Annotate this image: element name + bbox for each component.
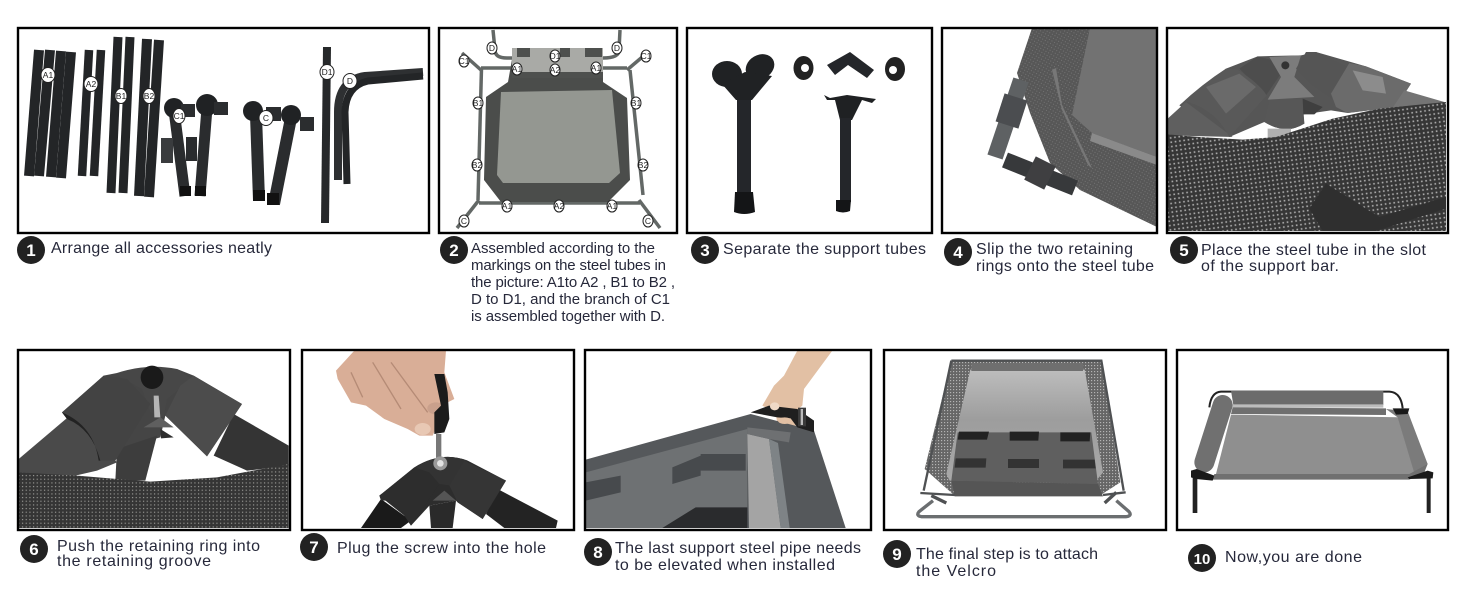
velcro strips <box>955 432 1096 468</box>
part labels: A1 <box>502 201 512 211</box>
bottom support bar <box>918 501 1130 517</box>
part labels: D <box>489 43 495 53</box>
mesh fabric <box>1168 102 1446 231</box>
assembled support tube <box>712 49 779 214</box>
panel: step 2 marked frame layout photo <box>438 27 677 233</box>
steel tube frame <box>457 30 660 228</box>
panel: step 1 accessories photo <box>17 27 429 233</box>
back frame <box>1209 392 1403 408</box>
screwdriver <box>434 374 449 461</box>
panel: step 4 retaining rings photo <box>941 27 1157 233</box>
tubes B1 <box>111 37 130 193</box>
steel tube with upper ring <box>995 80 1021 157</box>
panel: step 10 finished bed photo <box>1176 349 1448 530</box>
mesh fabric <box>19 464 289 528</box>
part labels: A1 <box>43 70 53 80</box>
step 9 caption <box>883 540 1098 580</box>
step 2 caption: D to D1, and the branch of C1 <box>471 291 670 308</box>
part labels: B2 <box>472 160 482 170</box>
part labels <box>459 42 653 227</box>
step 5 caption: of the support bar. <box>1201 258 1339 275</box>
step 6 caption: the retaining groove <box>57 553 211 570</box>
panel: step 3 support tubes photo <box>686 27 932 233</box>
part labels: C <box>263 113 269 123</box>
step 9 caption: The final step is to attach <box>916 546 1098 563</box>
step 4 caption: Slip the two retaining <box>976 241 1133 258</box>
step 2 caption: the picture: A1to A2 , B1 to B2 , <box>471 274 675 291</box>
step 6 caption <box>20 535 260 570</box>
step 4 caption: rings onto the steel tube <box>976 258 1154 275</box>
part labels: C <box>461 216 467 226</box>
bed mesh frame <box>925 361 1120 496</box>
part labels: B2 <box>144 91 154 101</box>
panel: step 9 velcro underside photo <box>883 349 1166 530</box>
step 1 caption: 1 <box>26 241 36 260</box>
tubes A2 <box>82 50 101 176</box>
part labels: D <box>614 43 620 53</box>
step 6 caption: Push the retaining ring into <box>57 538 260 555</box>
tubes D1 and D <box>325 47 423 223</box>
step 1 caption <box>17 236 272 264</box>
step 8 caption: 8 <box>593 543 603 562</box>
part labels: C1 <box>459 56 470 66</box>
step 9 caption: 9 <box>892 545 902 564</box>
panel: step 6 push retaining ring photo <box>17 349 290 530</box>
step 3 caption: 3 <box>700 241 710 260</box>
step 10 caption <box>1188 544 1362 572</box>
step 2 caption: is assembled together with D. <box>471 308 665 325</box>
part labels: D1 <box>322 67 333 77</box>
step 2 caption: Assembled according to the <box>471 240 655 257</box>
panel: step 5 tube in slot photo <box>1166 27 1448 233</box>
part labels: B1 <box>116 91 126 101</box>
step 2 caption: markings on the steel tubes in <box>471 257 666 274</box>
retaining rings <box>794 56 905 81</box>
fabric bed <box>1213 409 1428 480</box>
steel tube with lower ring <box>1005 160 1075 188</box>
tubes and elbow <box>19 366 289 481</box>
step 9 caption: the Velcro <box>916 563 996 580</box>
part labels: D1 <box>550 51 561 61</box>
screw head <box>433 456 447 470</box>
part labels: C1 <box>641 51 652 61</box>
mesh bed corner <box>1017 28 1157 227</box>
step 3 caption: Separate the support tubes <box>723 241 926 258</box>
elbow connector <box>827 52 874 78</box>
step 4 caption: 4 <box>953 243 963 262</box>
step 6 caption: 6 <box>29 540 39 559</box>
step 7 caption: Plug the screw into the hole <box>337 540 546 557</box>
part labels: C <box>645 216 651 226</box>
frame tubes and joints <box>920 361 1126 503</box>
step 10 caption: 10 <box>1194 551 1210 568</box>
joint in hand <box>751 402 814 432</box>
part labels: A1 <box>512 64 522 74</box>
part labels: B1 <box>473 98 483 108</box>
separated support tube <box>824 95 876 212</box>
tubes and elbow <box>361 457 558 528</box>
panel: step 7 screwdriver photo <box>301 349 574 530</box>
part labels: D <box>347 76 353 86</box>
step 7 caption <box>300 533 546 561</box>
panel: step 8 elevated support pipe photo <box>584 349 871 530</box>
step 10 caption: Now,you are done <box>1225 549 1362 566</box>
arm and hand <box>762 351 832 426</box>
step 4 caption <box>944 238 1154 275</box>
hand <box>336 351 454 436</box>
part labels: A2 <box>86 79 96 89</box>
part labels: A1 <box>591 63 601 73</box>
part labels: A2 <box>554 201 564 211</box>
part labels: B1 <box>631 98 641 108</box>
part labels <box>41 64 357 126</box>
step 3 caption <box>691 236 926 264</box>
step 5 caption: 5 <box>1179 241 1189 260</box>
step 7 caption: 7 <box>309 538 319 557</box>
step 1 caption: Arrange all accessories neatly <box>51 240 272 257</box>
joints <box>1191 408 1433 481</box>
step 5 caption <box>1170 236 1427 275</box>
step 2 caption: 2 <box>449 241 459 260</box>
step 8 caption: The last support steel pipe needs <box>615 540 861 557</box>
part labels: C1 <box>174 111 185 121</box>
step 8 caption <box>584 538 861 574</box>
tubes A1 <box>29 50 71 178</box>
step 2 caption <box>440 236 675 325</box>
connectors C <box>243 101 314 205</box>
part labels: A1 <box>607 201 617 211</box>
velcro patch <box>1309 184 1446 231</box>
mesh bed <box>484 48 630 202</box>
mesh fabric <box>586 414 846 528</box>
part labels: A2 <box>550 65 560 75</box>
step 5 caption: Place the steel tube in the slot <box>1201 242 1427 259</box>
back panel <box>1231 391 1386 415</box>
pillow roll <box>1204 405 1223 462</box>
step 8 caption: to be elevated when installed <box>615 557 835 574</box>
connectors C1 <box>161 94 228 196</box>
tubes B2 <box>139 39 159 197</box>
part labels: B2 <box>638 160 648 170</box>
legs <box>1195 474 1429 513</box>
tubes and elbow <box>1168 52 1444 139</box>
